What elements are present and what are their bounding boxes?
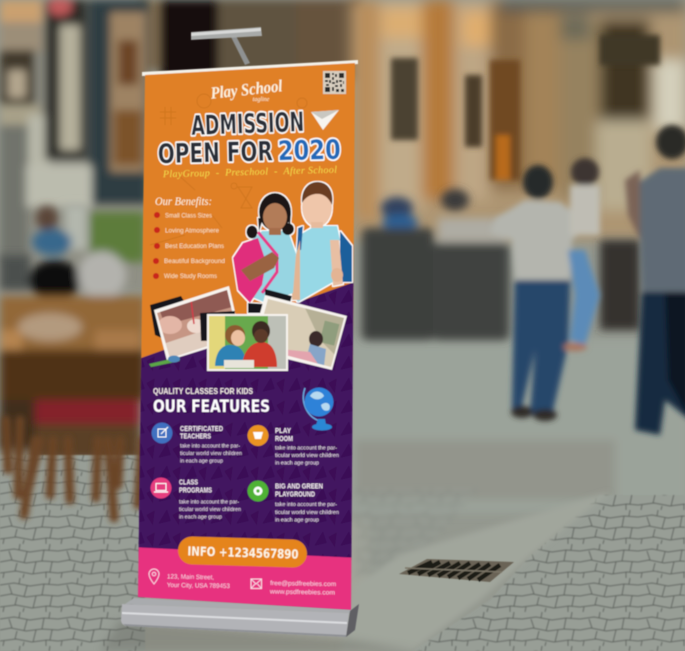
features subheading: QUALITY CLASSES FOR KIDS (153, 386, 253, 396)
web and email text: www.psdfreebies.com (269, 588, 335, 597)
feature title (275, 426, 293, 443)
photo: two boys (200, 311, 288, 371)
photo: child drawing (150, 285, 236, 361)
feature body: in each age group (275, 518, 319, 524)
feature: big and green playground (248, 480, 339, 524)
feature body: ticular world view children (180, 451, 242, 457)
cobblestone pavement left (0, 455, 145, 651)
play school logo: tagline (253, 97, 270, 103)
benefits list (153, 212, 225, 280)
icon: edit (152, 422, 172, 444)
floor (140, 338, 685, 651)
icon: location pin (149, 569, 159, 584)
phone pill (178, 536, 307, 568)
feature: play room (248, 425, 339, 466)
benefit: small class sizes: Small Class Sizes (165, 212, 212, 220)
feature body: take into account the par- (275, 446, 337, 452)
contact block (251, 579, 336, 597)
feature: certificated teachers (152, 422, 242, 464)
shadow at banner base (100, 620, 420, 651)
cafe chair legs (6, 420, 142, 518)
hanger arm (231, 36, 250, 65)
feature body: ticular world view children (275, 510, 339, 516)
address block (149, 569, 231, 590)
purple diagonal panel (130, 280, 360, 560)
feature body: ticular world view children (275, 453, 339, 459)
address text: Your City, USA 789453 (167, 582, 230, 590)
left storefront (0, 0, 148, 290)
boy (292, 182, 352, 302)
benefits heading: Our Benefits: (155, 196, 212, 208)
drain grate (399, 559, 514, 582)
cobblestone pavement right (412, 495, 685, 651)
feature title: TEACHERS (180, 432, 211, 440)
icon: laptop (150, 478, 172, 498)
base end cap (346, 604, 359, 637)
feature body: take into account the par- (275, 502, 337, 508)
icon: ball (248, 480, 268, 502)
cobblestone pavement middle (355, 488, 480, 580)
feature body: in each age group (179, 514, 222, 520)
benches and seated people (362, 189, 640, 340)
features heading: OUR FEATURES (153, 397, 270, 416)
photo of two children (233, 182, 352, 313)
benefit: wide study rooms: Wide Study Rooms (164, 273, 217, 280)
QR code (323, 71, 346, 94)
headline: admission: ADMISSION (191, 107, 305, 142)
feature title (179, 478, 212, 494)
roll-up stand hanger (191, 27, 262, 65)
black paper behind photo (150, 296, 187, 340)
benefit: best education plans: Best Education Plans (165, 243, 224, 250)
paper plane icon (311, 110, 339, 130)
feature title: PLAYGROUND (275, 490, 316, 498)
programme subtitle: PlayGroup - Preschool - After School (162, 165, 337, 180)
orange panel (130, 60, 360, 370)
headline: open for 2020: 2020 (277, 135, 341, 167)
feature body: ticular world view children (179, 507, 241, 513)
photo: playroom (250, 295, 350, 370)
benefit: loving atmosphere: Loving Atmosphere (165, 228, 219, 234)
banner top rail (142, 60, 358, 76)
icon: envelope (251, 579, 262, 588)
right storefront (350, 0, 685, 240)
feature title: CLASS (179, 478, 198, 486)
feature title (180, 424, 224, 440)
person in grey shirt (625, 125, 685, 435)
faint school doodles (150, 94, 307, 245)
address text: 123, Main Street, (167, 574, 214, 581)
hanger bar (191, 27, 262, 40)
feature title (275, 482, 323, 498)
icon: hands (248, 425, 268, 446)
benefit: beautiful background: Beautiful Background (164, 258, 225, 265)
feature body: take into account the par- (179, 500, 239, 506)
storefront behind the banner (140, 0, 361, 80)
feature body (180, 444, 242, 464)
banner (130, 60, 360, 620)
feature title: PLAY (275, 426, 291, 435)
feature body: take into account the par- (180, 444, 240, 450)
feature title: PROGRAMS (179, 486, 212, 494)
web and email text (269, 580, 336, 597)
feature title: CERTIFICATED (180, 424, 224, 433)
scissors and pencils icon (149, 356, 180, 367)
feature title: ROOM (275, 434, 293, 443)
feature title: BIG AND GREEN (275, 482, 323, 490)
roll-up base (121, 598, 359, 637)
feature body (179, 500, 241, 520)
address text (167, 574, 231, 590)
feature body: in each age group (275, 460, 319, 466)
headline: open for 2020: OPEN FOR (157, 136, 273, 170)
left cafe people and table (0, 205, 145, 460)
person in white top (490, 158, 600, 421)
web and email text: free@psdfreebies.com (270, 580, 336, 588)
feature body (275, 502, 339, 524)
pink footer (137, 546, 352, 610)
feature body: in each age group (180, 458, 223, 464)
feature: class programs (150, 478, 241, 520)
play school logo: Play School (209, 76, 283, 103)
base top plate (125, 598, 352, 613)
feature body (275, 446, 339, 466)
stone slab path (340, 492, 610, 651)
icon: globe (303, 388, 334, 430)
base body (121, 604, 349, 637)
phone pill: INFO +1234567890 (187, 543, 299, 562)
girl (233, 193, 300, 313)
